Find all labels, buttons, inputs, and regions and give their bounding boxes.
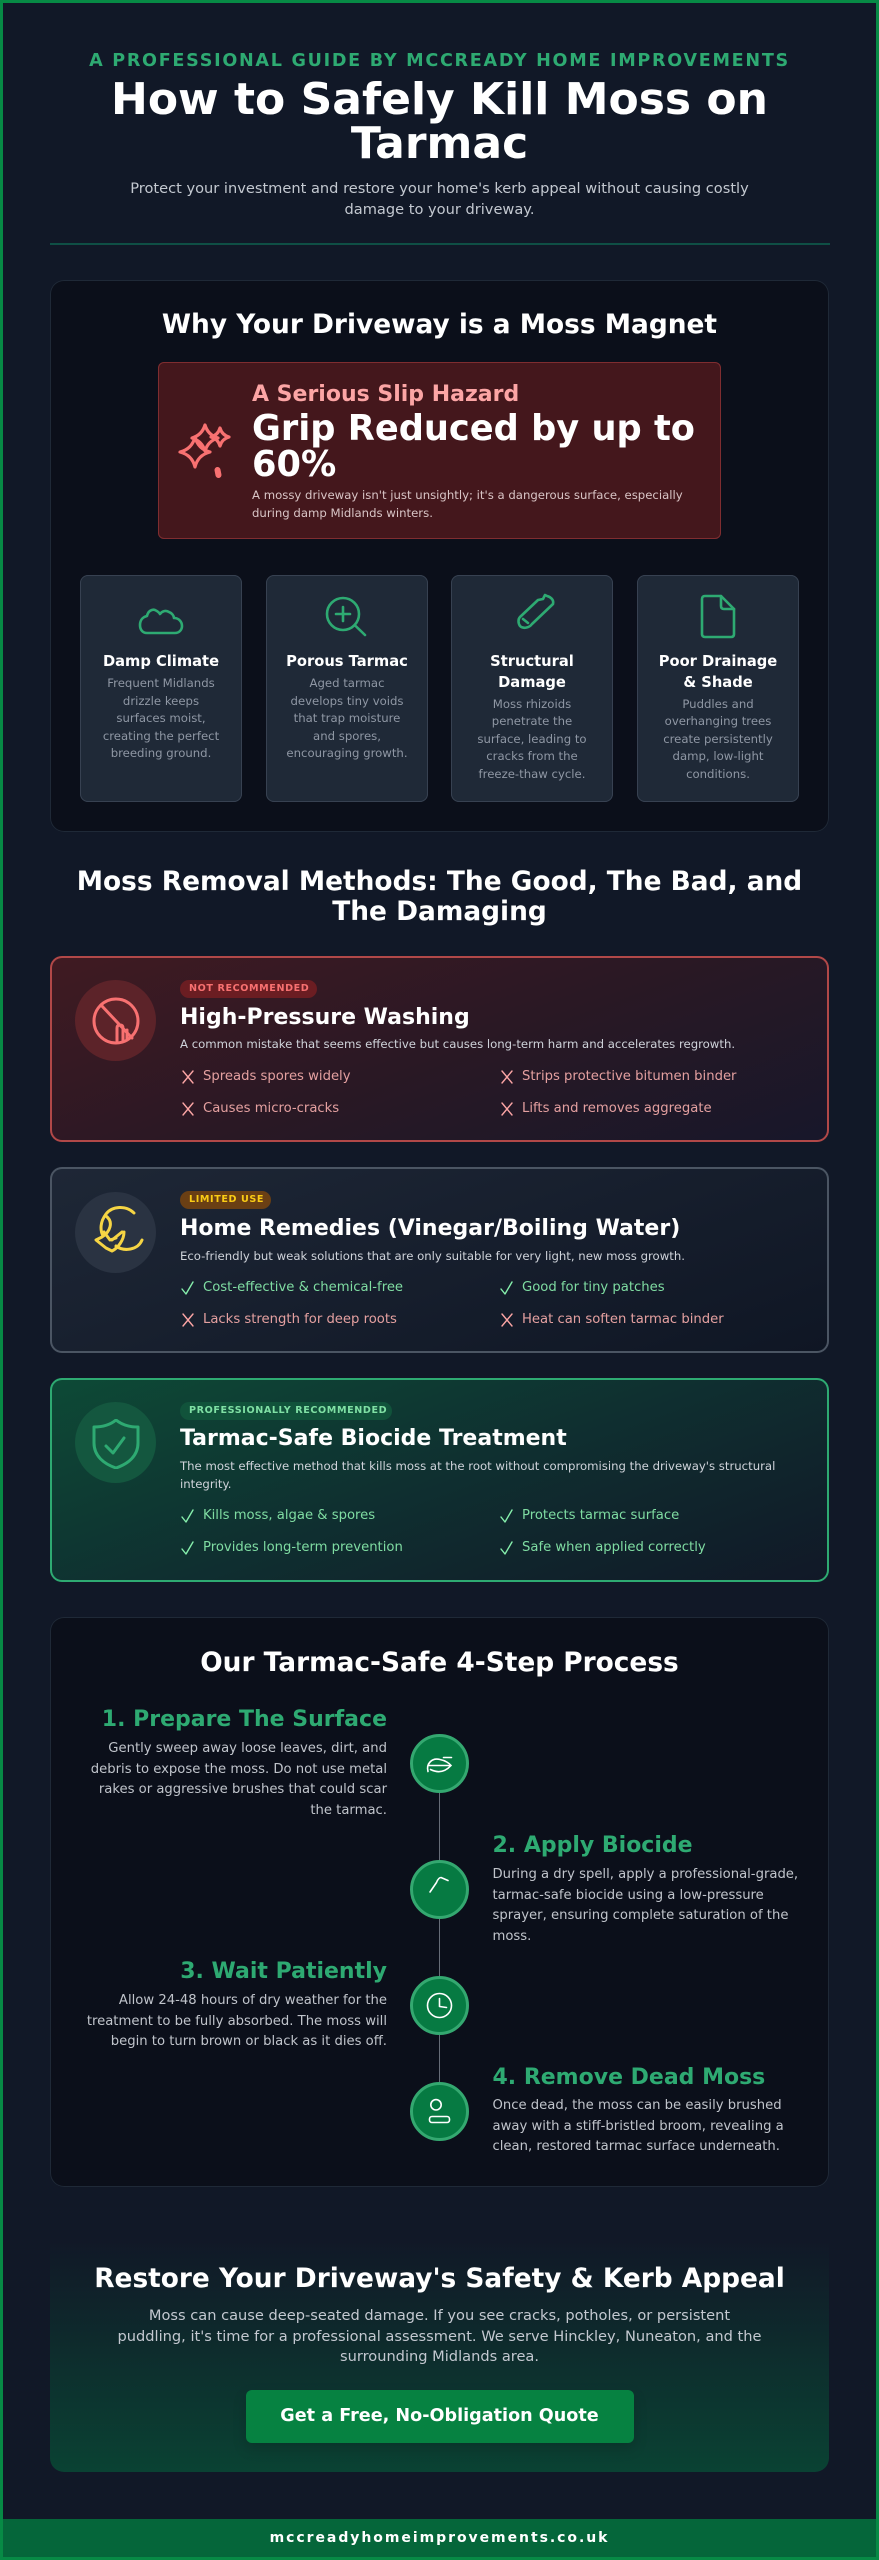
point: Strips protective bitumen binder [522, 1069, 736, 1084]
stat: grip reduced: 60% [252, 444, 336, 485]
badge: limited use: LIMITED USE [189, 1194, 264, 1205]
footer: mccreadyhomeimprovements.co.uk [270, 2530, 609, 2546]
icon: document [700, 594, 736, 638]
text: structural damage: cracks from the [486, 749, 578, 763]
text: porous tarmac: Aged tarmac [309, 676, 385, 690]
badge: not recommended [180, 980, 317, 998]
title [111, 74, 768, 169]
text: cta: surrounding Midlands area. [340, 2348, 539, 2365]
text: porous tarmac: and spores, [313, 729, 381, 743]
text: damp climate: drizzle keeps [123, 694, 199, 708]
icon glyph: leaf [94, 1206, 144, 1252]
point: Lacks strength for deep roots [203, 1312, 397, 1327]
text: poor drainage: damp, low-light [673, 749, 763, 763]
heading: removal methods: The Damaging [332, 896, 547, 927]
heading: structural damage: Damage [498, 674, 566, 691]
text: porous tarmac: encouraging growth. [286, 746, 408, 760]
point: Lifts and removes aggregate [522, 1101, 712, 1116]
text: damp climate: Frequent Midlands [107, 676, 215, 690]
text: poor drainage [663, 696, 773, 781]
method: biocide treatment [50, 1378, 829, 1582]
point: Causes micro-cracks [203, 1101, 339, 1116]
step text: Allow 24-48 hours of dry weather for the [119, 1993, 387, 2008]
step text: begin to turn brown or black as it dies off. [111, 2034, 387, 2049]
step text: sprayer, ensuring complete saturation of the [492, 1908, 788, 1923]
card: poor drainage [637, 575, 799, 802]
button: quote [246, 2390, 634, 2443]
step icon 2 [410, 1860, 469, 1919]
label: slip hazard: A Serious Slip Hazard [252, 382, 519, 407]
method description [180, 1459, 775, 1491]
panel: why your driveway is a moss magnet [50, 280, 829, 832]
text: damp climate: creating the perfect [103, 729, 219, 743]
stat: grip reduced [252, 408, 695, 485]
icon: crack [517, 594, 554, 630]
badge: limited use [180, 1191, 271, 1209]
step 4 [492, 2062, 812, 2162]
method description: Eco-friendly but weak solutions that are only suitable for very light, new moss growth. [180, 1249, 685, 1263]
icon: circle [75, 1192, 156, 1273]
badge: professionally recommended [180, 1402, 392, 1420]
heading: structural damage [490, 653, 574, 691]
icon glyph: shield [92, 1419, 140, 1469]
badge: not recommended: NOT RECOMMENDED [189, 983, 309, 994]
step text [50, 1991, 387, 2052]
title: Tarmac [351, 118, 528, 169]
step text: the tarmac. [310, 1802, 387, 1818]
step text [492, 2096, 784, 2158]
note: hazard: during damp Midlands winters. [252, 506, 433, 520]
text: poor drainage: create persistently [663, 732, 773, 746]
text: structural damage: freeze-thaw cycle. [479, 767, 585, 781]
method: high-pressure washing [50, 956, 829, 1142]
text: cta: puddling, it's time for a professional assessment. We serve Hinckley, Nuneaton, and the [118, 2328, 762, 2344]
title: How to Safely Kill Moss on [111, 74, 768, 125]
text: poor drainage: conditions. [686, 767, 750, 781]
badge: professionally recommended: PROFESSIONALLY RECOMMENDED [189, 1405, 387, 1416]
text: poor drainage: Puddles and [682, 696, 754, 710]
step text: rakes or aggressive brushes that could scar [99, 1782, 387, 1797]
button: quote: Get a Free, No-Obligation Quote [280, 2406, 599, 2426]
text: porous tarmac: that trap moisture [294, 711, 400, 725]
step text: clean, restored tarmac surface underneath. [492, 2139, 780, 2154]
heading: moss magnet: Why Your Driveway is a Moss Magnet [162, 309, 717, 340]
heading: poor drainage: Poor Drainage [659, 653, 777, 670]
panel: call to action [50, 2240, 829, 2472]
point: Cost-effective & chemical-free [203, 1280, 403, 1295]
note: hazard [252, 488, 683, 520]
step text [91, 1741, 388, 1818]
text: structural damage: penetrate the [492, 714, 572, 728]
footer [0, 2519, 879, 2560]
icon: cloud [138, 608, 184, 634]
heading: removal methods: Moss Removal Methods: The Good, The Bad, and [77, 866, 802, 897]
text: cta [50, 2306, 829, 2368]
step title: 4. Remove Dead Moss [492, 2065, 765, 2090]
panel: 4-step process [50, 1617, 829, 2187]
card: damp climate [80, 575, 242, 802]
eyebrow: A PROFESSIONAL GUIDE BY MCCREADY HOME IMPROVEMENTS [89, 51, 790, 71]
card: porous tarmac [266, 575, 428, 802]
point: Spreads spores widely [203, 1069, 351, 1084]
stat: grip reduced: Grip Reduced by up to [252, 408, 695, 449]
text: structural damage: Moss rhizoids [493, 696, 571, 710]
step text: During a dry spell, apply a professional-grade, [492, 1867, 798, 1882]
method description: integrity. [180, 1477, 231, 1491]
text: damp climate: surfaces moist, [116, 711, 206, 725]
text: porous tarmac: develops tiny voids [290, 694, 404, 708]
subtitle: damage to your driveway. [344, 200, 534, 218]
text: cta: Moss can cause deep-seated damage. If you see cracks, potholes, or persistent [149, 2307, 730, 2324]
text: damp climate: breeding ground. [111, 746, 211, 760]
text: structural damage: surface, leading to [477, 732, 587, 746]
text: porous tarmac [286, 676, 408, 760]
step title: 2. Apply Biocide [492, 1833, 693, 1858]
method title: Tarmac-Safe Biocide Treatment [180, 1426, 567, 1451]
step icon 1 [410, 1734, 469, 1793]
timeline line [439, 1787, 440, 2107]
text: damp climate [103, 676, 219, 760]
step 1 [91, 1707, 388, 1818]
point: Provides long-term prevention [203, 1540, 403, 1555]
point: Kills moss, algae & spores [203, 1508, 375, 1523]
step 3 [87, 1959, 387, 2049]
text: poor drainage: overhanging trees [665, 714, 771, 728]
step title: 1. Prepare The Surface [102, 1707, 387, 1732]
panel: methods [50, 956, 829, 1582]
card: structural damage [451, 575, 613, 802]
method description: A common mistake that seems effective but causes long-term harm and accelerates regrowth. [180, 1037, 735, 1051]
text: structural damage [477, 696, 587, 781]
heading: damp climate: Damp Climate [103, 653, 219, 670]
step text: debris to expose the moss. Do not use metal [91, 1762, 387, 1776]
divider [50, 243, 830, 245]
heading: process: Our Tarmac-Safe 4-Step Process [200, 1647, 679, 1678]
step text [492, 1867, 798, 1944]
method title: High-Pressure Washing [180, 1005, 470, 1030]
subtitle [130, 180, 749, 218]
step title: 3. Wait Patiently [180, 1959, 387, 1984]
icon: magnifier [326, 596, 366, 636]
heading: porous tarmac: Porous Tarmac [286, 653, 408, 670]
point: Heat can soften tarmac binder [522, 1312, 724, 1327]
icon glyph: no washing [92, 998, 140, 1044]
subtitle: Protect your investment and restore your home's kerb appeal without causing costly [130, 180, 749, 197]
step text: Gently sweep away loose leaves, dirt, and [108, 1741, 387, 1756]
callout: slip hazard [158, 362, 721, 539]
icon: prohibited [75, 980, 156, 1061]
step icon 3 [410, 1976, 469, 2035]
point: Safe when applied correctly [522, 1540, 706, 1555]
method description: The most effective method that kills moss at the root without compromising the driveway's structural [180, 1459, 775, 1473]
method title: Home Remedies (Vinegar/Boiling Water) [180, 1216, 680, 1241]
icon: circle [75, 1402, 156, 1483]
heading: removal methods [77, 866, 802, 927]
step text: tarmac-safe biocide using a low-pressure [492, 1888, 764, 1902]
step text: treatment to be fully absorbed. The moss will [87, 2014, 387, 2028]
heading: poor drainage [659, 653, 777, 691]
heading: structural damage: Structural [490, 653, 574, 670]
method: home remedies [50, 1167, 829, 1353]
step 2 [492, 1833, 798, 1944]
heading: cta: Restore Your Driveway's Safety & Kerb Appeal [94, 2263, 785, 2294]
icon: sparkles [178, 423, 231, 478]
heading: poor drainage: & Shade [683, 674, 753, 691]
step text: moss. [492, 1928, 531, 1944]
step text: away with a stiff-bristled broom, revealing a [492, 2118, 784, 2134]
step icon 4 [410, 2082, 469, 2141]
point: Good for tiny patches [522, 1280, 665, 1295]
step text: Once dead, the moss can be easily brushed [492, 2098, 782, 2113]
point: Protects tarmac surface [522, 1508, 679, 1523]
note: hazard: A mossy driveway isn't just unsightly; it's a dangerous surface, especially [252, 488, 683, 502]
